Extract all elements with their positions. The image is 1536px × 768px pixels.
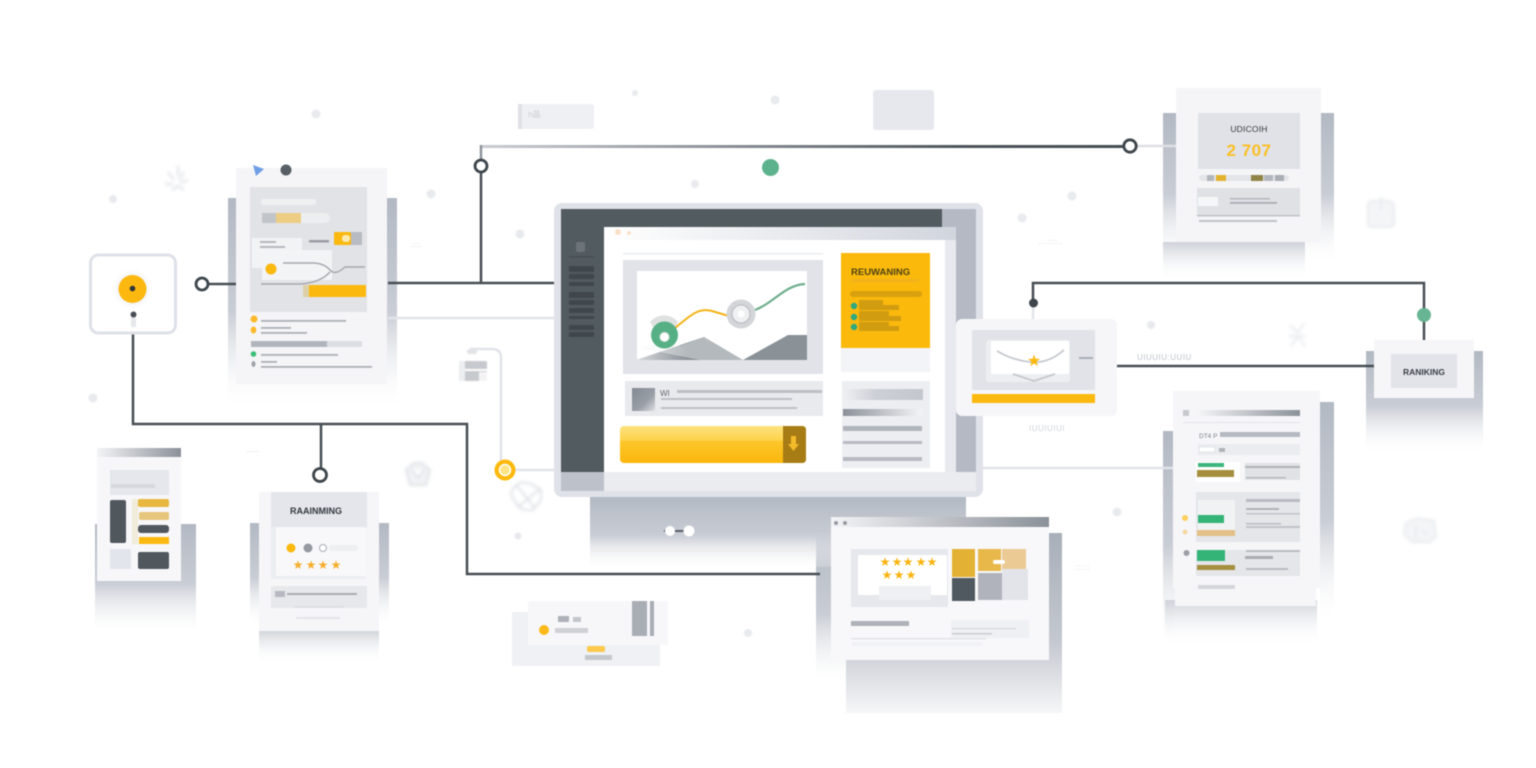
connector: left dark network	[133, 172, 1424, 574]
panel: top tag	[518, 104, 594, 129]
heading: highlight: REUWANING	[851, 267, 910, 278]
chart panel	[623, 253, 823, 374]
panel: right list card	[1173, 391, 1320, 606]
node: green top dot	[762, 159, 779, 176]
node: yellow ring	[494, 460, 516, 480]
panel shadow: left report card	[228, 198, 397, 405]
icon: dark dot	[280, 164, 292, 176]
node: dark top dot	[1029, 298, 1038, 308]
background speckle dots	[88, 90, 1155, 637]
stars: ★	[903, 555, 913, 569]
panel shadow: central monitor	[590, 497, 966, 567]
sidebar menu	[569, 242, 594, 337]
heading: stat label: UDICOIH	[1230, 124, 1268, 134]
panel shadow: right list card	[1163, 402, 1334, 645]
list panel: WI	[660, 389, 670, 398]
panel: left report card	[236, 164, 387, 384]
panel: rating card	[259, 492, 379, 631]
window dots	[615, 229, 631, 235]
segmented bar	[1199, 175, 1289, 181]
connector: top gradient line	[481, 145, 1126, 160]
heading: ranking: RANIKING	[1403, 367, 1445, 377]
node: monitor base dots	[640, 526, 830, 536]
panel shadow: ranking badge	[1366, 351, 1483, 451]
stars: ★	[916, 555, 926, 569]
icon: burst	[165, 166, 188, 190]
panel shadow: top right card	[1163, 113, 1334, 281]
row two	[1182, 492, 1300, 542]
row three	[1184, 550, 1300, 576]
yellow highlight card	[841, 253, 930, 372]
stars: ★	[906, 568, 916, 582]
row label: DT4 P	[1199, 433, 1217, 440]
icon: badge	[1368, 196, 1394, 227]
stat value: 2 707	[1226, 141, 1272, 160]
icon: hat	[406, 463, 430, 485]
stars: ★	[882, 568, 892, 582]
panel: central monitor	[554, 203, 983, 497]
right text panel	[842, 381, 930, 468]
node: start target	[90, 255, 176, 333]
faint micro labels: ....::::..	[1038, 239, 1062, 246]
faint micro labels	[247, 239, 1192, 572]
panel shadow: bottom center card	[816, 532, 1062, 713]
panel shadow: small left card	[95, 524, 196, 632]
stars: ★	[293, 558, 303, 572]
panel shadow: rating card	[250, 523, 389, 664]
panel: ranking badge	[1374, 340, 1474, 398]
stars: ★	[306, 558, 316, 572]
stars: ★	[892, 555, 902, 569]
chart area	[250, 187, 367, 312]
icon: star: ★	[1027, 353, 1041, 370]
stars: ★	[880, 555, 890, 569]
stars: ★	[331, 558, 341, 572]
yellow button	[620, 426, 806, 463]
panel: bottom small ticket	[528, 601, 668, 660]
panel: star thumbnail card	[956, 319, 1117, 416]
faint micro labels: .:::.	[410, 242, 422, 249]
panel: bottom center review card	[831, 517, 1049, 660]
list rows	[250, 316, 372, 368]
panel: small left card	[97, 448, 181, 581]
panel: top blank card	[873, 90, 934, 130]
icon: crossed wheel	[511, 482, 541, 510]
icon: blue arrow	[253, 165, 264, 176]
icon: gear	[1288, 323, 1306, 346]
panel: top tag: n品	[528, 110, 540, 119]
list panel	[625, 381, 823, 416]
node: green dot on ranking link	[1417, 308, 1431, 322]
stars	[293, 558, 341, 572]
icon: cube	[1404, 518, 1436, 542]
connector: light links	[388, 146, 1176, 470]
stars: ★	[318, 558, 328, 572]
stars: ★	[927, 555, 937, 569]
heading: rating: RAAINMING	[290, 506, 342, 516]
icon: tool on light link	[459, 349, 487, 381]
faint micro labels: :::::	[1076, 563, 1090, 572]
color tiles	[952, 549, 1028, 601]
faint micro labels: UIUUIU:UUIU	[1137, 353, 1192, 362]
node: ring joints	[196, 140, 1136, 482]
row one	[1196, 462, 1300, 482]
stars: ★	[894, 568, 904, 582]
faint micro labels: .....	[247, 447, 259, 454]
stars	[880, 555, 937, 582]
panel: top right stat card	[1176, 88, 1321, 242]
decorative faded icons	[165, 166, 1436, 542]
faint micro labels: IUUIUIUI	[1029, 424, 1065, 433]
panel shadow: bottom small ticket	[512, 612, 660, 666]
